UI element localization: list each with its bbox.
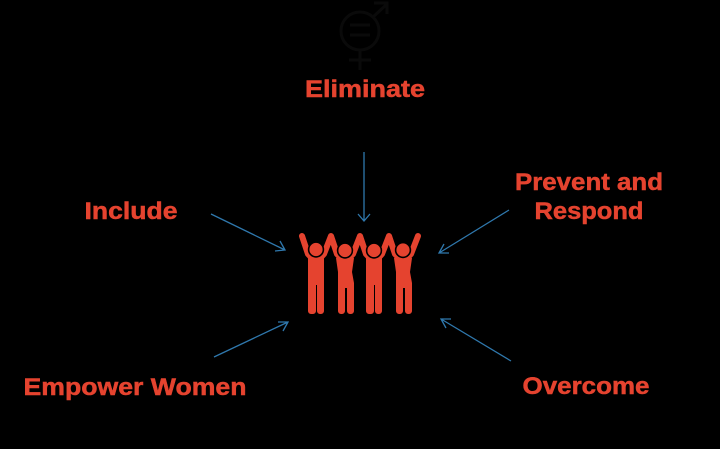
arrow: from Empower Women bbox=[214, 322, 288, 357]
heading: Eliminate: Eliminate bbox=[305, 76, 425, 103]
label: Include: Include bbox=[84, 198, 178, 225]
label: Prevent and Respond: Prevent and bbox=[515, 169, 663, 196]
label: Prevent and Respond: Respond bbox=[534, 198, 644, 225]
arrow: from Include bbox=[211, 214, 285, 251]
arrow: from Eliminate bbox=[358, 152, 370, 221]
arrow: from Overcome bbox=[441, 319, 511, 361]
label: Overcome: Overcome bbox=[522, 373, 650, 400]
icon: gender equality symbol bbox=[341, 3, 387, 70]
icon: four people holding hands up bbox=[302, 236, 418, 314]
label: Empower Women: Empower Women bbox=[24, 374, 246, 401]
arrow: from Prevent and Respond bbox=[439, 210, 509, 253]
label: Prevent and Respond bbox=[515, 169, 663, 225]
